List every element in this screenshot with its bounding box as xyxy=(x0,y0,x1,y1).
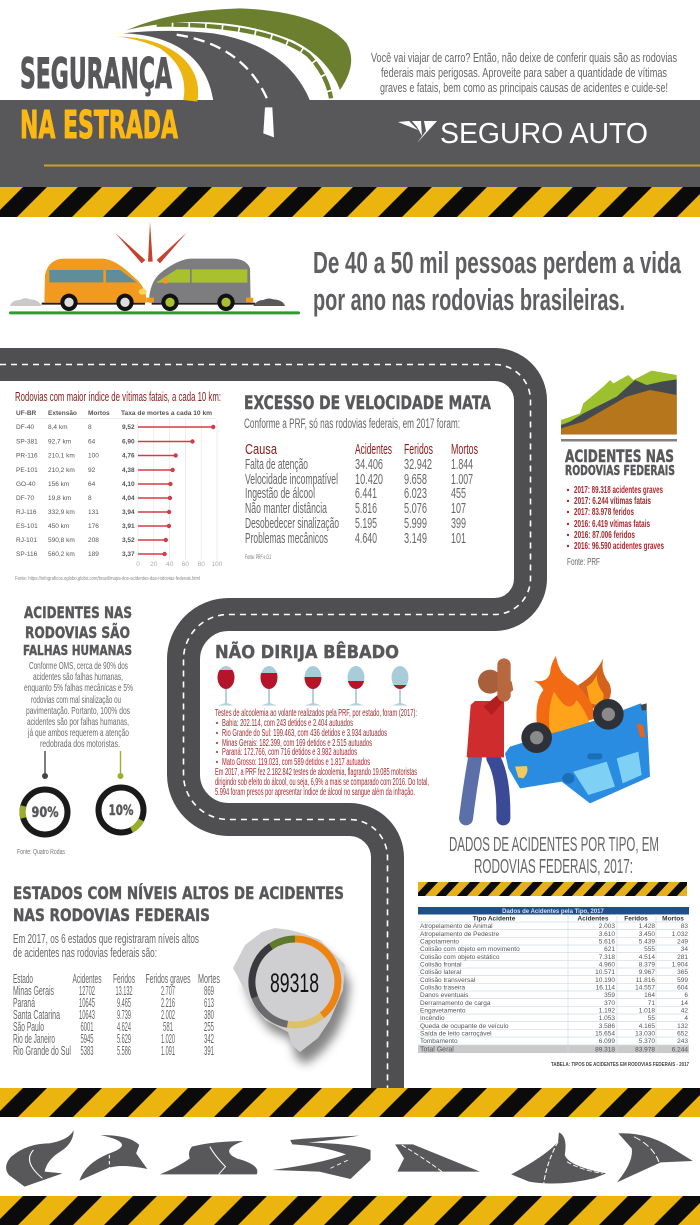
bullet list: 2017: 6.244 vítimas fatais xyxy=(574,495,651,507)
table: states: 2.216 xyxy=(161,996,175,1010)
red text block: dirigindo sob efeito do álcool, ou seja, 6,9% a mais se comparado com 2016. Do total, xyxy=(215,777,429,788)
winding road xyxy=(0,364,531,1090)
chart column headers xyxy=(16,410,212,417)
heading: FALHAS HUMANAS xyxy=(23,643,132,659)
road icon 4 xyxy=(272,1136,371,1179)
table: accidents by type: 3.450 xyxy=(639,931,655,938)
intro text xyxy=(371,50,677,95)
chart rows: 8 xyxy=(88,495,92,502)
table: states: 13.132 xyxy=(116,984,133,998)
chart rows: 4,04 xyxy=(122,495,135,502)
chart rows: 450 km xyxy=(48,523,69,530)
source: Fonte: PRF xyxy=(567,557,600,568)
illustration: mountains xyxy=(561,371,677,434)
paragraph: já que ambos requerem a atenção xyxy=(27,727,129,739)
table: accidents by type: 15.654 xyxy=(595,1030,615,1038)
chart rows: DF-40 xyxy=(16,424,34,431)
table: accidents by type: Feridos xyxy=(624,916,648,922)
table: causes: Velocidade incompatível xyxy=(245,472,338,488)
chart rows: 210,2 km xyxy=(48,467,75,474)
heading: ESTADOS COM NÍVEIS ALTOS DE ACIDENTES xyxy=(13,882,344,904)
table: causes: 107 xyxy=(451,501,466,517)
title: SEGURANÇA xyxy=(20,49,172,98)
table: accidents by type: 599 xyxy=(677,977,688,984)
panel: fatal index chart xyxy=(15,389,223,582)
chart rows: 3,91 xyxy=(122,523,135,530)
chart rows: 92 xyxy=(88,467,96,474)
table: causes: 34.406 xyxy=(355,457,383,473)
header band xyxy=(0,100,700,187)
table: accidents by type: 652 xyxy=(677,1030,688,1038)
table: accidents by type: Incêndio xyxy=(420,1015,445,1022)
chart: Brazil map with ring total xyxy=(233,928,350,1064)
table: causes: 1.844 xyxy=(451,457,473,473)
table: states: 380 xyxy=(204,1008,214,1022)
bullet list xyxy=(567,484,664,552)
table: states: 12702 xyxy=(79,984,95,998)
red text block: Minas Gerais: 182.399, com 169 detidos e 2.515 autuados xyxy=(222,738,372,749)
table: accidents by type: 4.165 xyxy=(639,1023,655,1030)
chart rows: 3,37 xyxy=(122,551,135,558)
panel: federal highway accidents xyxy=(561,371,677,568)
table: states: Acidentes xyxy=(72,972,102,986)
bullet list: 2017: 83.978 feridos xyxy=(574,506,634,518)
chart axis: 80 xyxy=(198,561,205,568)
table: accidents by type xyxy=(418,907,689,1054)
chart axis xyxy=(136,561,223,568)
table: causes: Desobedecer sinalização xyxy=(245,516,339,532)
chart rows: 4,38 xyxy=(122,467,135,474)
chart rows: 4,76 xyxy=(122,452,135,460)
chart rows: GO-40 xyxy=(16,481,36,488)
panel: drunk driving xyxy=(215,640,429,798)
heading: NÃO DIRIJA BÊBADO xyxy=(215,640,399,663)
paragraph: pavimentação. Portanto, 100% dos xyxy=(26,705,130,717)
table: causes: 5.999 xyxy=(404,516,427,532)
table: accidents by type: Queda de ocupante de veículo xyxy=(420,1023,509,1030)
red text block: Mato Grosso: 119.023, com 589 detidos e 1.817 autuados xyxy=(222,757,370,768)
table: accidents by type: 249 xyxy=(677,938,688,946)
table: states: Feridos xyxy=(113,972,135,986)
table: accidents by type: 164 xyxy=(644,992,655,999)
logo: Seguro Auto: SEGURO AUTO xyxy=(440,118,648,150)
chart axis: 20 xyxy=(150,561,158,568)
table: states: 9.465 xyxy=(117,996,131,1010)
table: causes: 101 xyxy=(451,531,466,547)
table: causes: 6.023 xyxy=(404,486,427,502)
table: accidents by type: Dados de Acidentes pela Tipo, 2017 xyxy=(502,909,605,915)
table: states: Santa Catarina xyxy=(13,1008,60,1022)
illustration: curved road xyxy=(118,8,351,137)
chart rows: 4,10 xyxy=(122,481,135,488)
chart rows: 64 xyxy=(88,438,96,446)
table: accidents by type: 14.557 xyxy=(635,984,655,992)
subheading: Conforme a PRF, só nas rodovias federais, em 2017 foram: xyxy=(244,416,460,431)
chart axis: 0 xyxy=(136,561,140,568)
donut: 10%: 10% xyxy=(108,803,134,819)
table: accidents by type: 1.904 xyxy=(672,962,688,968)
chart rows: 176 xyxy=(88,523,99,530)
paragraph: redobrada dos motoristas. xyxy=(40,738,120,750)
chart rows: PR-116 xyxy=(16,452,38,460)
table: states: Feridos graves xyxy=(146,972,190,986)
table: accidents by type: 359 xyxy=(604,992,615,999)
chart rows: 100 xyxy=(88,452,99,460)
table: causes: Não manter distância xyxy=(245,501,328,517)
heading xyxy=(23,603,132,659)
red text block: Em 2017, a PRF fez 2.182.842 testes de alcoolemia, flagrando 19.085 motoristas xyxy=(215,767,417,778)
table: states: 5.586 xyxy=(117,1044,131,1058)
heading xyxy=(13,882,344,926)
icons: road silhouettes xyxy=(6,1130,693,1187)
chart rows: 590,8 km xyxy=(48,537,75,544)
paragraph: Em 2017, os 6 estados que registraram níveis altos xyxy=(13,931,199,946)
table: accidents by type: Colisão com objeto estático xyxy=(420,954,500,961)
chart rows: 19,8 km xyxy=(48,495,71,502)
table: accidents by type: Acidentes xyxy=(577,916,609,922)
bullet list: 2016: 87.006 feridos xyxy=(574,529,635,541)
heading: ACIDENTES NAS xyxy=(24,603,132,622)
chart rows: 9,52 xyxy=(122,424,135,431)
table: accidents by type: 13.030 xyxy=(635,1030,655,1038)
road icon 7 xyxy=(617,1133,693,1182)
table: accidents by type: Atropelamento de Animal xyxy=(420,923,493,930)
table: accidents by type: 1.192 xyxy=(599,1008,615,1014)
table: accidents by type: 555 xyxy=(644,946,655,953)
table: accidents by type: 11.816 xyxy=(636,977,655,984)
chart rows: ES-101 xyxy=(16,523,38,530)
table: states xyxy=(13,972,220,1058)
table: accidents by type: 42 xyxy=(681,1008,688,1014)
road icon 1 xyxy=(6,1130,74,1187)
table: accidents by type: 281 xyxy=(677,954,688,961)
illustration: person and burning car xyxy=(466,656,650,818)
table: accidents by type: 5.370 xyxy=(639,1038,655,1045)
chart rows: 8,4 km xyxy=(48,424,68,431)
table: accidents by type: 6.244 xyxy=(672,1046,688,1054)
table: accidents by type: 243 xyxy=(677,1038,688,1045)
table: accidents by type: Colisão lateral xyxy=(420,969,462,976)
panel: states xyxy=(13,882,344,1058)
heading: RODOVIAS SÃO xyxy=(25,623,130,642)
table: states: 342 xyxy=(204,1032,214,1046)
table: causes xyxy=(245,442,478,547)
red text block: Testes de alcoolemia ao volante realizados pela PRF, por estado, foram (2017): xyxy=(215,708,417,719)
chart rows: SP-116 xyxy=(16,551,38,558)
chart rows: 332,9 km xyxy=(48,509,75,516)
table: causes: 3.149 xyxy=(404,531,427,547)
bullet list: 2016: 6.419 vítimas fatais xyxy=(574,518,650,530)
red text block: 5.994 foram presos por apresentar índice de álcool no sangue além da infração. xyxy=(215,787,415,798)
headline xyxy=(313,245,681,317)
table: states: 6001 xyxy=(80,1020,94,1034)
title: NA ESTRADA xyxy=(20,103,178,147)
red text block: Paraná: 172.766, com 716 detidos e 3.982 autuados xyxy=(222,747,357,758)
road icon 2 xyxy=(79,1135,147,1181)
chart rows: PE-101 xyxy=(16,467,38,474)
table: accidents by type: Tipo Acidente xyxy=(473,916,516,922)
table: causes: 6.441 xyxy=(355,486,377,502)
table: accidents by type: 2.003 xyxy=(599,923,615,930)
table: states: 10643 xyxy=(79,1008,95,1022)
table: causes: Mortos xyxy=(451,442,478,458)
table: accidents by type: 1.053 xyxy=(599,1015,615,1022)
table: states: São Paulo xyxy=(13,1020,44,1034)
table: accidents by type: 5.439 xyxy=(639,938,655,946)
chart rows: SP-381 xyxy=(16,438,38,446)
hazard stripes: table header xyxy=(418,882,687,896)
chart rows: DF-70 xyxy=(16,495,34,502)
chart column headers: Extensão xyxy=(48,410,77,417)
table: causes: 5.816 xyxy=(355,501,377,517)
table: causes: 32.942 xyxy=(404,457,432,473)
heading: EXCESSO DE VELOCIDADE MATA xyxy=(244,392,491,414)
donut: 90% xyxy=(22,751,68,834)
paragraph xyxy=(24,660,133,750)
table: accidents by type: 1.428 xyxy=(639,923,655,930)
table: accidents by type: 6.099 xyxy=(599,1038,615,1045)
source: Fonte: PRF e G1 xyxy=(245,554,271,561)
table: accidents by type: 1.032 xyxy=(672,931,688,938)
paragraph: rodovias com mal sinalização ou xyxy=(31,694,121,706)
table: accidents by type: 83.978 xyxy=(635,1046,655,1054)
source: Fonte: Quatro Rodas xyxy=(17,849,65,856)
hazard stripes: top xyxy=(0,187,700,217)
table: states: Rio de Janeiro xyxy=(13,1032,55,1046)
chart axis: 60 xyxy=(182,561,189,568)
paragraph: acidentes são por falhas humanas, xyxy=(27,716,129,728)
table: causes: 455 xyxy=(451,486,466,502)
illustration: crash of two vans xyxy=(9,222,300,314)
table: states: 1.091 xyxy=(161,1044,175,1058)
panel: speeding xyxy=(244,392,491,561)
title xyxy=(20,49,178,147)
chart rows: 8 xyxy=(88,424,92,431)
table: accidents by type: 370 xyxy=(604,1000,615,1007)
road icon 5 xyxy=(395,1144,480,1172)
chart axis: 100 xyxy=(212,561,223,568)
table: accidents by type: 365 xyxy=(677,969,688,976)
paragraph: enquanto 5% falhas mecânicas e 5% xyxy=(24,682,133,694)
table: causes: 9.658 xyxy=(404,472,427,488)
table: accidents by type: 83 xyxy=(681,923,688,930)
table: causes: Problemas mecânicos xyxy=(245,531,328,547)
table: accidents by type: 1.018 xyxy=(639,1008,655,1014)
table: accidents by type: Colisão com objeto em movimento xyxy=(420,946,520,953)
table: states: 10645 xyxy=(79,996,95,1010)
table: accidents by type: 10.571 xyxy=(595,969,615,976)
table: accidents by type: Colisão traseira xyxy=(420,984,466,992)
table: accidents by type: 5.616 xyxy=(599,938,615,946)
table: causes: 399 xyxy=(451,516,466,532)
chart column headers: UF-BR xyxy=(16,410,37,417)
paragraph: de acidentes nas rodovias federais são: xyxy=(13,945,157,960)
chart rows: RJ-116 xyxy=(16,509,37,516)
table: accidents by type: 4 xyxy=(684,1015,688,1022)
table: states: 613 xyxy=(204,996,214,1010)
table: accidents by type: Capotamento xyxy=(420,938,459,946)
table: states: Rio Grande do Sul xyxy=(13,1044,71,1058)
table: accidents by type: 9.967 xyxy=(639,969,655,976)
chart rows: 3,94 xyxy=(122,509,135,516)
table: states: 869 xyxy=(204,984,214,998)
table: causes: Causa xyxy=(245,442,278,458)
table: causes: Ingestão de álcool xyxy=(245,486,315,502)
road icon 3 xyxy=(160,1141,257,1174)
table: accidents by type: 7.318 xyxy=(599,954,615,961)
table: accidents by type: Mortos xyxy=(662,916,684,922)
table: accidents by type: 4.960 xyxy=(599,962,615,968)
table: states: 1.020 xyxy=(161,1032,175,1046)
chart column headers: Taxa de mortes a cada 10 km xyxy=(121,410,212,417)
table: accidents by type: 10.190 xyxy=(595,977,615,984)
chart rows: 92,7 km xyxy=(48,438,71,446)
red text block: Bahia: 202.114, com 243 detidos e 2.404 autuados xyxy=(222,718,353,729)
heading: NAS RODOVIAS FEDERAIS xyxy=(13,906,210,926)
table: states: Mortes xyxy=(198,972,220,986)
chart rows: 208 xyxy=(88,537,99,544)
table: states: 2.707 xyxy=(161,984,175,998)
table: accidents by type: 89.318 xyxy=(595,1046,615,1054)
table: causes: Feridos xyxy=(404,442,433,458)
table: causes: Falta de atenção xyxy=(245,457,308,473)
table: accidents by type: 14 xyxy=(681,1000,688,1007)
table: accidents by type: 604 xyxy=(677,984,688,992)
chart rows: RJ-101 xyxy=(16,537,37,544)
chart rows: 210,1 km xyxy=(48,452,75,460)
lollipop bars xyxy=(138,425,215,556)
table: states: 391 xyxy=(204,1044,214,1058)
table: states: 5945 xyxy=(80,1032,94,1046)
table: accidents by type: 71 xyxy=(648,1000,655,1007)
paragraph: acidentes são falhas humanas, xyxy=(33,671,123,683)
table: accidents by type: 3.586 xyxy=(599,1023,615,1030)
table: accidents by type: 4.514 xyxy=(639,954,655,961)
chart rows: 131 xyxy=(88,509,99,516)
table: accidents by type: 132 xyxy=(677,1023,688,1030)
table: accidents by type: 55 xyxy=(648,1015,655,1022)
donut: 10% xyxy=(98,751,144,832)
chart rows: 189 xyxy=(88,551,99,558)
table: accidents by type: 6 xyxy=(684,992,688,999)
table: accidents by type: 8.379 xyxy=(639,962,655,968)
chart column headers: Mortos xyxy=(88,410,110,417)
chart rows: 156 km xyxy=(48,481,69,488)
table: states: Estado xyxy=(13,972,33,986)
heading: data by type xyxy=(449,834,659,878)
chart heading: Rodovias com maior índice de vítimas fatais, a cada 10 km: xyxy=(15,389,221,404)
chart source: Fonte: https://infograficos.oglobo.globo.com/brasil/mapa-dos-acidentes-das-rodovias-federais.html xyxy=(15,576,200,582)
paragraph: Conforme OMS, cerca de 90% dos xyxy=(29,660,128,672)
table: causes: 1.007 xyxy=(451,472,473,488)
table: accidents by type: 621 xyxy=(604,946,615,953)
table: accidents by type: 3.610 xyxy=(599,931,615,938)
table: accidents by type: Colisão frontal xyxy=(420,962,462,968)
table: accidents by type: Total Geral xyxy=(420,1046,454,1054)
hazard stripes: lower xyxy=(0,1088,700,1117)
table: states: 4.624 xyxy=(117,1020,131,1034)
table: states: 9.739 xyxy=(117,1008,131,1022)
table: states: 5383 xyxy=(80,1044,94,1058)
table: accidents by type: Engavetamento xyxy=(420,1008,466,1014)
table: accidents by type: Derramamento de carga xyxy=(420,1000,491,1007)
chart: Brazil map with ring total: 89318 xyxy=(270,968,319,998)
road icon 6 xyxy=(511,1132,606,1184)
table: accidents by type: 34 xyxy=(681,946,688,953)
chart rows: 560,2 km xyxy=(48,551,75,558)
table: states: 5.629 xyxy=(117,1032,131,1046)
table: accidents by type: Danos eventuais xyxy=(420,992,469,999)
table: causes: Acidentes xyxy=(355,442,392,458)
table: states: Paraná xyxy=(13,996,35,1010)
table: causes: 5.076 xyxy=(404,501,427,517)
panel: human failure xyxy=(17,603,144,856)
chart axis: 40 xyxy=(166,561,174,568)
chart rows xyxy=(15,418,217,560)
table: accidents by type: Atropelamento de Pedestre xyxy=(420,931,500,938)
table: causes: 4.640 xyxy=(355,531,377,547)
table: states: 255 xyxy=(204,1020,214,1034)
table: causes: 5.195 xyxy=(355,516,377,532)
red text block xyxy=(215,708,429,798)
table: accidents by type: Saída de leito carroçável xyxy=(420,1030,492,1038)
table: states: Minas Gerais xyxy=(13,984,54,998)
red text block: Rio Grande do Sul: 199.463, com 436 detidos e 3.934 autuados xyxy=(222,728,387,739)
table: states: 581 xyxy=(163,1020,173,1034)
chart rows: 64 xyxy=(88,481,96,488)
icons: wine glasses xyxy=(216,666,410,706)
table: states: 2.002 xyxy=(161,1008,175,1022)
donut: 90%: 90% xyxy=(32,805,58,821)
table: accidents by type: Tombamento xyxy=(420,1038,458,1045)
table: accidents by type: 16.114 xyxy=(596,984,615,992)
chart rows: 3,52 xyxy=(122,537,135,544)
paragraph xyxy=(13,931,199,960)
hazard stripes: bottom xyxy=(0,1196,700,1225)
table: accidents by type: Colisão transversal xyxy=(420,977,476,984)
chart rows: 6,90 xyxy=(122,438,135,446)
table: causes: 10.420 xyxy=(355,472,383,488)
